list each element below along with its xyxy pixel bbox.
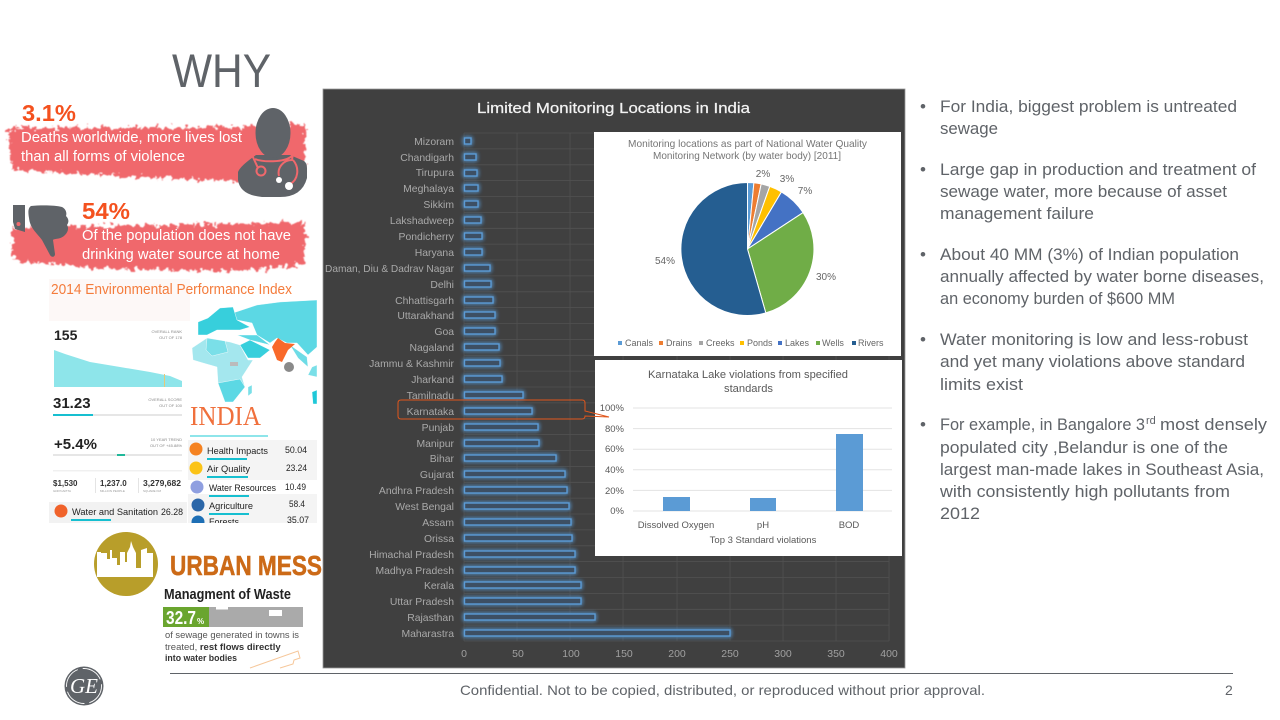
- y axis labels: 40%: [605, 465, 625, 476]
- pie data labels: 7%: [798, 186, 812, 197]
- panel: Limited Monitoring Locations chart: [323, 89, 905, 668]
- pie data labels: [655, 169, 836, 283]
- overall score: OUT OF 100: [159, 403, 183, 408]
- callout: Karnataka: [398, 400, 609, 419]
- x axis labels: 100: [562, 648, 580, 660]
- state labels: Kerala: [424, 581, 454, 592]
- panel: Urban Mess: [94, 532, 322, 668]
- scorecard rows: Agriculture: [209, 501, 253, 512]
- bullet 2: sewage water, more because of asset: [940, 182, 1227, 201]
- panel: 2014 Environmental Performance Index: [49, 279, 317, 528]
- bars: [663, 434, 863, 511]
- bullet 2: Large gap in production and treatment of: [940, 160, 1256, 179]
- state labels: Uttarakhand: [397, 311, 454, 322]
- state labels: Mizoram: [414, 137, 454, 148]
- state labels: Andhra Pradesh: [379, 486, 454, 497]
- chart title: Limited Monitoring Locations in India: [477, 100, 751, 117]
- y axis labels: [600, 403, 625, 517]
- text: deaths description: [21, 129, 243, 165]
- category labels: pH: [757, 520, 769, 531]
- y axis labels: 100%: [600, 403, 625, 414]
- bullet 3: annually affected by water borne diseases,: [940, 267, 1264, 286]
- category labels: BOD: [839, 520, 859, 531]
- ten year trend: [53, 436, 182, 472]
- x axis labels: 400: [880, 648, 898, 660]
- x axis labels: 300: [774, 648, 792, 660]
- bullet 5: 2012: [940, 504, 980, 523]
- bullet 2: •: [920, 160, 926, 179]
- row: water and sanitation: [49, 502, 187, 523]
- text: drinking water description: Of the population does not have: [82, 227, 291, 244]
- state labels: Lakshadweep: [390, 216, 454, 227]
- state labels: Gujarat: [420, 470, 454, 481]
- country facts: [53, 478, 182, 493]
- overall rank: OVERALL RANK: [151, 329, 182, 334]
- pie legend: Wells: [822, 338, 844, 348]
- row: water and sanitation: Water and Sanitation: [72, 507, 158, 518]
- pie legend: Canals: [625, 338, 654, 348]
- page number: 2: [1225, 682, 1233, 698]
- icon: GE logo: [64, 666, 104, 706]
- state labels: Madhya Pradesh: [375, 566, 454, 577]
- icon: doctor: [238, 108, 307, 197]
- state labels: Delhi: [430, 280, 454, 291]
- state labels: Daman, Diu & Dadrav Nagar: [325, 264, 455, 275]
- bullet 5: For example, in Bangalore 3: [940, 415, 1145, 434]
- x axis labels: 350: [827, 648, 845, 660]
- stat: 54%: 54%: [82, 198, 130, 224]
- bullet 5: most densely: [1160, 415, 1268, 434]
- pie legend: Creeks: [706, 338, 735, 348]
- text: deaths description: Deaths worldwide, more lives lost: [21, 129, 243, 146]
- bullet 4: and yet many violations above standard: [940, 352, 1245, 371]
- progress bar: 32.7%: 32.7: [166, 608, 196, 628]
- country facts: GDP/CAPITA: [53, 489, 71, 493]
- scorecard rows: 23.24: [286, 463, 307, 474]
- category labels: [638, 520, 859, 546]
- text block: key points: [920, 97, 1268, 523]
- scorecard rows: 50.04: [285, 445, 307, 456]
- text: sewage note: [165, 630, 299, 664]
- state labels: Meghalaya: [403, 184, 454, 195]
- y axis labels: 60%: [605, 444, 625, 455]
- state labels: Haryana: [415, 248, 454, 259]
- state labels: Chhattisgarh: [395, 296, 454, 307]
- overall rank: OUT OF 178: [159, 335, 183, 340]
- India highlighted: [272, 338, 295, 362]
- bullet 3: About 40 MM (3%) of Indian population: [940, 245, 1239, 264]
- title: WHY: [172, 44, 271, 97]
- bullet 5: rd: [1146, 415, 1156, 427]
- state labels: Tirupura: [416, 168, 454, 179]
- pie title: [628, 138, 868, 162]
- x axis labels: 250: [721, 648, 739, 660]
- state labels: Manipur: [416, 439, 455, 450]
- bullet 3: •: [920, 245, 926, 264]
- state labels: Punjab: [422, 423, 454, 434]
- bullet 3: an economy burden of $600 MM: [940, 289, 1175, 308]
- pie data labels: 2%: [756, 169, 770, 180]
- bullet 1: [920, 97, 1237, 138]
- x axis labels: 200: [668, 648, 686, 660]
- text: sewage note: treated, rest flows directly: [165, 642, 281, 653]
- pie data labels: 54%: [655, 256, 675, 267]
- x axis labels: [461, 648, 898, 660]
- stat: 3.1%: 3.1%: [22, 100, 76, 126]
- scorecard rows: 35.07: [287, 515, 309, 526]
- pie legend: Drains: [666, 338, 693, 348]
- panel: deaths statistic: [8, 100, 307, 197]
- scorecard rows: Forests: [209, 517, 239, 528]
- icon: city skyline: [94, 532, 158, 596]
- grid lines: [633, 408, 892, 511]
- brush stroke: drinking water: [13, 222, 306, 271]
- scorecard rows: 10.49: [285, 482, 306, 493]
- overall score: OVERALL SCORE: [148, 397, 182, 402]
- pie legend: Rivers: [858, 338, 884, 348]
- country facts: SQUARE KM: [143, 489, 162, 493]
- state labels: Goa: [434, 327, 454, 338]
- bullet 4: Water monitoring is low and less-robust: [940, 330, 1248, 349]
- state labels: Jammu & Kashmir: [369, 359, 455, 370]
- pie legend: [618, 338, 884, 348]
- x axis labels: 0: [461, 648, 467, 660]
- state labels: Himachal Pradesh: [369, 550, 454, 561]
- bullet 1: For India, biggest problem is untreated: [940, 97, 1237, 116]
- row: water and sanitation: 26.28: [161, 507, 183, 518]
- pie title: Monitoring locations as part of National Water Quality: [628, 138, 868, 150]
- x axis labels: 50: [512, 648, 524, 660]
- country facts: MILLION PEOPLE: [100, 489, 125, 493]
- country facts: 1,237.0: [100, 479, 127, 488]
- state labels: Maharastra: [401, 629, 454, 640]
- bullet 3: [920, 245, 1264, 308]
- pie legend: Lakes: [785, 338, 810, 348]
- text: deaths description: than all forms of violence: [21, 148, 185, 165]
- overall rank: 155: [54, 327, 78, 343]
- bullet 2: [920, 160, 1256, 223]
- state labels: Orissa: [424, 534, 454, 545]
- pie title: Monitoring Network (by water body) [2011]: [653, 150, 841, 162]
- panel: drinking water statistic: [13, 198, 306, 271]
- footer rule: [170, 673, 1233, 674]
- country facts: $1,530: [53, 479, 78, 488]
- y axis labels: 20%: [605, 486, 625, 497]
- ten year trend: +5.4%: [54, 436, 97, 453]
- icon: GE logo: GE: [70, 674, 98, 698]
- scorecard rows: Water Resources: [209, 483, 276, 494]
- text: sewage note: of sewage generated in towns is: [165, 630, 299, 641]
- progress bar: 32.7%: [163, 607, 303, 628]
- x axis labels: 150: [615, 648, 633, 660]
- horizontal bars: [464, 138, 730, 636]
- bullet 4: limits exist: [940, 375, 1023, 394]
- state labels: Chandigarh: [400, 153, 454, 164]
- progress bar: 32.7%: %: [197, 617, 204, 626]
- bullet 1: sewage: [940, 119, 998, 138]
- scorecard rows: Health Impacts: [207, 446, 268, 457]
- overall score: [53, 398, 182, 416]
- state labels: Tamilnadu: [407, 391, 454, 402]
- bar chart title: standards: [724, 383, 774, 395]
- bullet 1: •: [920, 97, 926, 116]
- ten year trend: 10 YEAR TREND: [151, 437, 182, 442]
- header background: [49, 279, 190, 321]
- state labels: Nagaland: [410, 343, 454, 354]
- bullet 5: populated city ,Belandur is one of the: [940, 438, 1228, 457]
- y axis labels: 80%: [605, 424, 625, 435]
- bar chart title: Karnataka Lake violations from specified: [648, 369, 848, 381]
- bullet 2: management failure: [940, 204, 1094, 223]
- text: drinking water description: [82, 227, 291, 263]
- ten year trend: OUT OF +45.88%: [150, 443, 182, 448]
- panel: Karnataka lake violations chart: [595, 360, 902, 556]
- state labels: Assam: [422, 518, 454, 529]
- bullet 5: [920, 415, 1268, 523]
- overall rank: [54, 327, 183, 387]
- bullet 4: •: [920, 330, 926, 349]
- overall score: 31.23: [53, 395, 91, 412]
- category labels: Dissolved Oxygen: [638, 520, 714, 531]
- state labels: Uttar Pradesh: [390, 597, 454, 608]
- bullet 4: [920, 330, 1248, 394]
- scorecard rows: Air Quality: [207, 464, 250, 475]
- state labels: Pondicherry: [399, 232, 455, 243]
- icon: thumbs down: [13, 205, 68, 257]
- heading: INDIA: INDIA: [190, 401, 261, 431]
- state labels: Bihar: [430, 454, 455, 465]
- pie slices: [681, 182, 814, 315]
- text: sewage note: into water bodies: [165, 653, 237, 664]
- state labels: Jharkand: [411, 375, 454, 386]
- state labels: West Bengal: [395, 502, 454, 513]
- text: drinking water description: drinking water source at home: [82, 246, 280, 263]
- bullet 5: with consistently high pollutants from: [939, 482, 1230, 501]
- footer text: Confidential. Not to be copied, distributed, or reproduced without prior approval.: [460, 682, 985, 698]
- pie legend: Ponds: [747, 338, 773, 348]
- bar chart title: [648, 369, 848, 395]
- map: India in Eurasia and Africa: [192, 300, 317, 404]
- state labels: Karnataka: [407, 407, 454, 418]
- magnifier: [284, 362, 294, 372]
- heading: Urban Mess: URBAN MESS: [170, 550, 322, 581]
- heading: EPI: 2014 Environmental Performance Index: [51, 281, 292, 298]
- bullet 5: •: [920, 415, 926, 434]
- bullet 5: largest man-made lakes in Southeast Asia,: [940, 460, 1264, 479]
- scorecard rows: [188, 440, 317, 528]
- scorecard rows: 58.4: [289, 499, 305, 510]
- pie data labels: 30%: [816, 272, 836, 283]
- country facts: 3,279,682: [143, 479, 182, 488]
- state labels: Rajasthan: [407, 613, 454, 624]
- category labels: Top 3 Standard violations: [710, 535, 817, 546]
- subheading: Managment of Waste: Managment of Waste: [164, 586, 291, 603]
- brush stroke: deaths: [8, 124, 306, 182]
- state labels: [325, 137, 455, 640]
- panel: pie chart: [594, 132, 901, 356]
- y axis labels: 0%: [610, 506, 625, 517]
- pie data labels: 3%: [780, 174, 794, 185]
- state labels: Sikkim: [423, 200, 454, 211]
